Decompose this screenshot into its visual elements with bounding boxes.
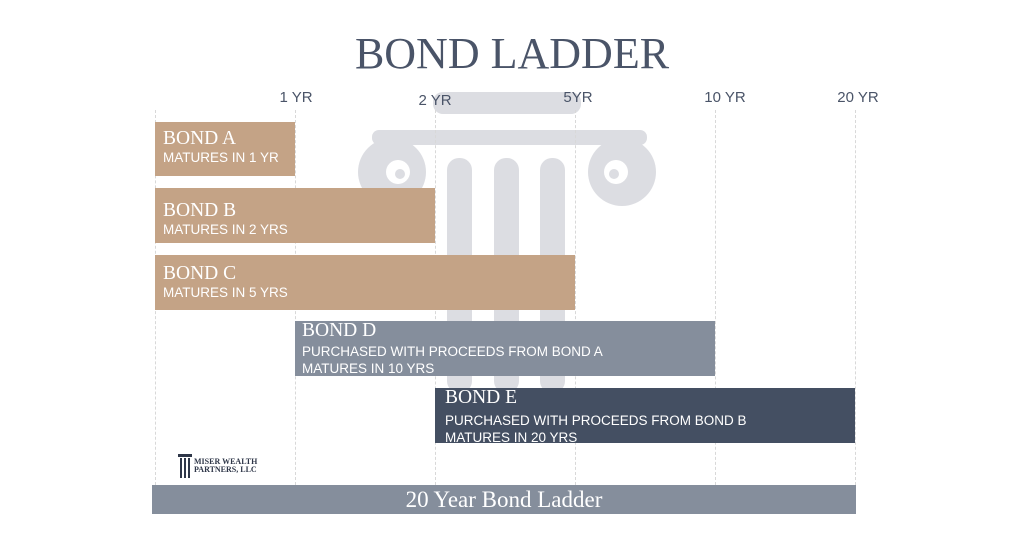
year axis labels: 1 YR: [279, 89, 313, 106]
year axis labels: 10 YR: [704, 89, 746, 106]
bar: bond C: [155, 255, 575, 310]
bar: bond B: MATURES IN 2 YRS: [163, 222, 288, 237]
bar: bond B: [155, 188, 435, 243]
bar: bond D: [295, 321, 715, 376]
bar: bond E: [435, 388, 855, 443]
bar: bond A: MATURES IN 1 YR: [163, 150, 279, 165]
bar: bond C: MATURES IN 5 YRS: [163, 285, 288, 300]
bottom banner: 20 Year Bond Ladder: [406, 487, 602, 512]
title: BOND LADDER: [355, 29, 669, 78]
bar: bond A: [155, 122, 295, 176]
bar: bond D: MATURES IN 10 YRS: [302, 361, 434, 376]
logo: MISER WEALTH: [194, 457, 257, 466]
bar: bond E: PURCHASED WITH PROCEEDS FROM BOND B: [445, 413, 747, 428]
logo: PARTNERS, LLC: [194, 465, 257, 474]
bar: bond D: BOND D: [302, 320, 376, 341]
bar: bond C: BOND C: [163, 263, 236, 284]
year axis labels: 20 YR: [837, 89, 879, 106]
bar: bond D: PURCHASED WITH PROCEEDS FROM BOND A: [302, 344, 603, 359]
bar: bond E: MATURES IN 20 YRS: [445, 430, 577, 445]
bar: bond B: BOND B: [163, 200, 236, 221]
bar: bond E: BOND E: [445, 387, 517, 408]
bottom banner: [152, 485, 856, 514]
year axis labels: [279, 89, 879, 109]
year axis labels: 2 YR: [418, 92, 452, 109]
year axis labels: 5YR: [563, 89, 593, 106]
logo: [178, 454, 258, 478]
bar: bond A: BOND A: [163, 128, 236, 149]
